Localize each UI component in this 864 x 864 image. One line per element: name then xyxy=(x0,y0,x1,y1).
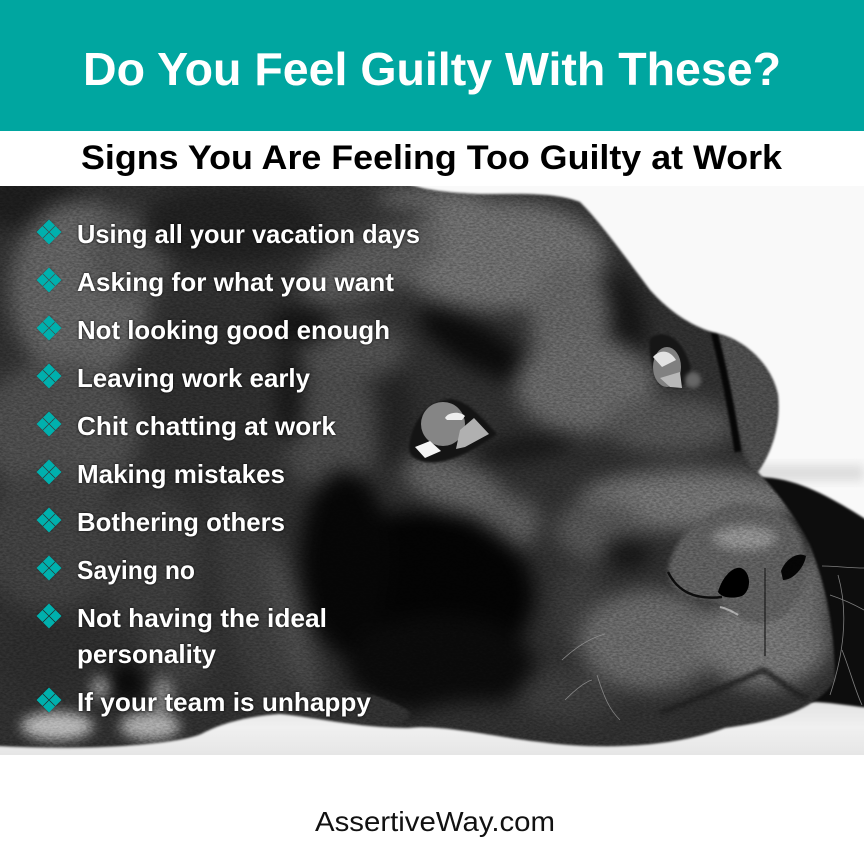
subtitle: Signs You Are Feeling Too Guilty at Work xyxy=(81,139,782,177)
item: Not having the ideal personality xyxy=(36,603,327,669)
blurred toes of front paw xyxy=(21,676,180,740)
dog body and head xyxy=(0,170,864,770)
item: Asking for what you want: Asking for what you want xyxy=(77,267,394,297)
item: If your team is unhappy: If your team is unhappy xyxy=(77,687,372,717)
item: Saying no: Saying no xyxy=(77,555,195,585)
title banner xyxy=(0,0,864,131)
blurred body at left xyxy=(0,186,85,231)
tonal map xyxy=(0,170,830,736)
head fur xyxy=(395,200,605,310)
item: Not having the ideal personality: Not having the ideal xyxy=(77,603,327,633)
fur texture xyxy=(0,186,832,746)
black cheek and ear xyxy=(337,500,544,654)
item: Not looking good enough: Not looking good enough xyxy=(77,315,390,345)
ear tip xyxy=(350,692,410,719)
photo: sad black labrador lying on floor xyxy=(0,170,864,770)
title: Do You Feel Guilty With These? xyxy=(83,43,781,95)
far eye xyxy=(649,334,701,388)
mouth line xyxy=(660,670,808,713)
far ear xyxy=(712,325,779,472)
whiskers xyxy=(562,566,864,720)
item: Chit chatting at work: Chit chatting at work xyxy=(77,411,337,441)
nose xyxy=(668,503,806,656)
muzzle xyxy=(580,470,800,530)
footer website: AssertiveWay.com xyxy=(315,806,555,837)
item: Using all your vacation days: Using all your vacation days xyxy=(77,219,420,249)
item: Not having the ideal personality: personality xyxy=(77,639,217,669)
item: Making mistakes: Making mistakes xyxy=(77,459,285,489)
white backdrop xyxy=(0,186,864,755)
bullet list xyxy=(36,219,420,717)
far front leg at right xyxy=(760,477,864,708)
floor xyxy=(0,700,864,755)
near eye xyxy=(409,399,497,463)
item: Leaving work early: Leaving work early xyxy=(77,363,311,393)
item: Bothering others: Bothering others xyxy=(77,507,285,537)
